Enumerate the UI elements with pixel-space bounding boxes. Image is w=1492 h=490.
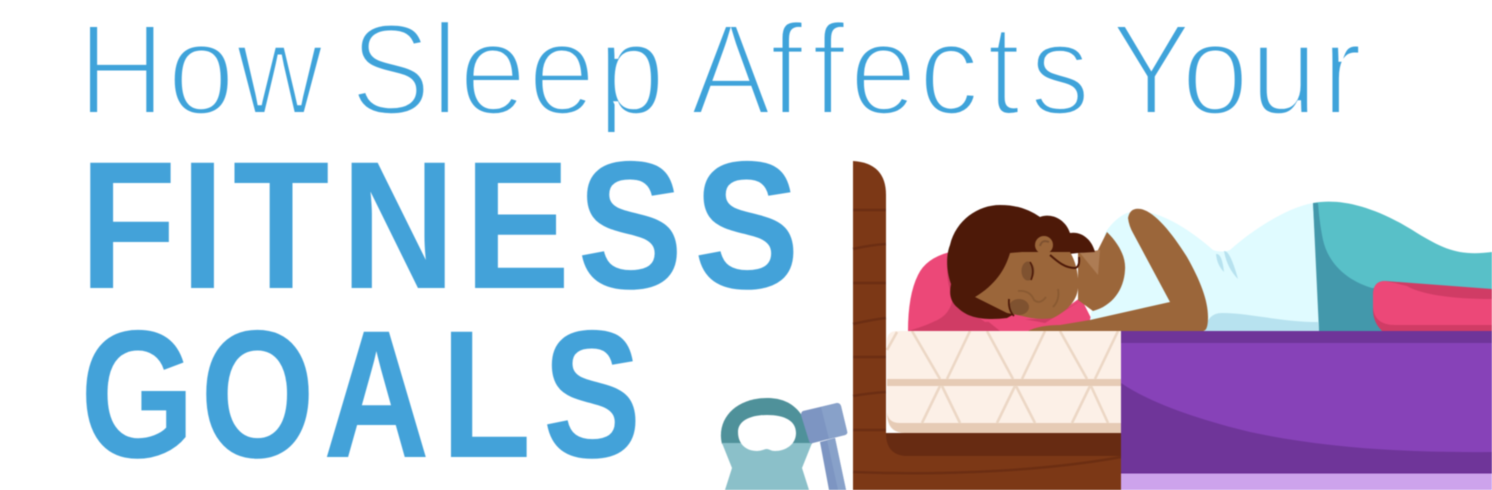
shirt shadow <box>1205 313 1319 331</box>
leg pillow <box>1373 281 1492 331</box>
mattress <box>887 331 1121 433</box>
title word: FITNESS: FITNESS <box>80 125 800 327</box>
trousers shadow <box>1313 203 1385 331</box>
neck and shoulder <box>1078 232 1125 311</box>
closed eyes <box>1022 262 1034 280</box>
shirt folds <box>1216 251 1238 279</box>
hair back <box>947 205 1095 319</box>
nose and mouth <box>1018 289 1058 307</box>
trousers <box>1313 202 1492 331</box>
purple blanket <box>1121 331 1492 490</box>
icon: hammer <box>801 403 847 490</box>
icon: kettlebell <box>721 398 812 490</box>
title line: How Sleep Affects Your: How Sleep Affects Your <box>78 0 1362 142</box>
shirt <box>1090 203 1319 331</box>
sleeping person <box>947 202 1492 331</box>
pink head pillow <box>908 252 1094 331</box>
bed frame <box>853 161 1121 490</box>
hair strand <box>1050 255 1079 268</box>
face <box>975 252 1078 319</box>
arm <box>1028 209 1208 331</box>
ear <box>1035 236 1053 254</box>
